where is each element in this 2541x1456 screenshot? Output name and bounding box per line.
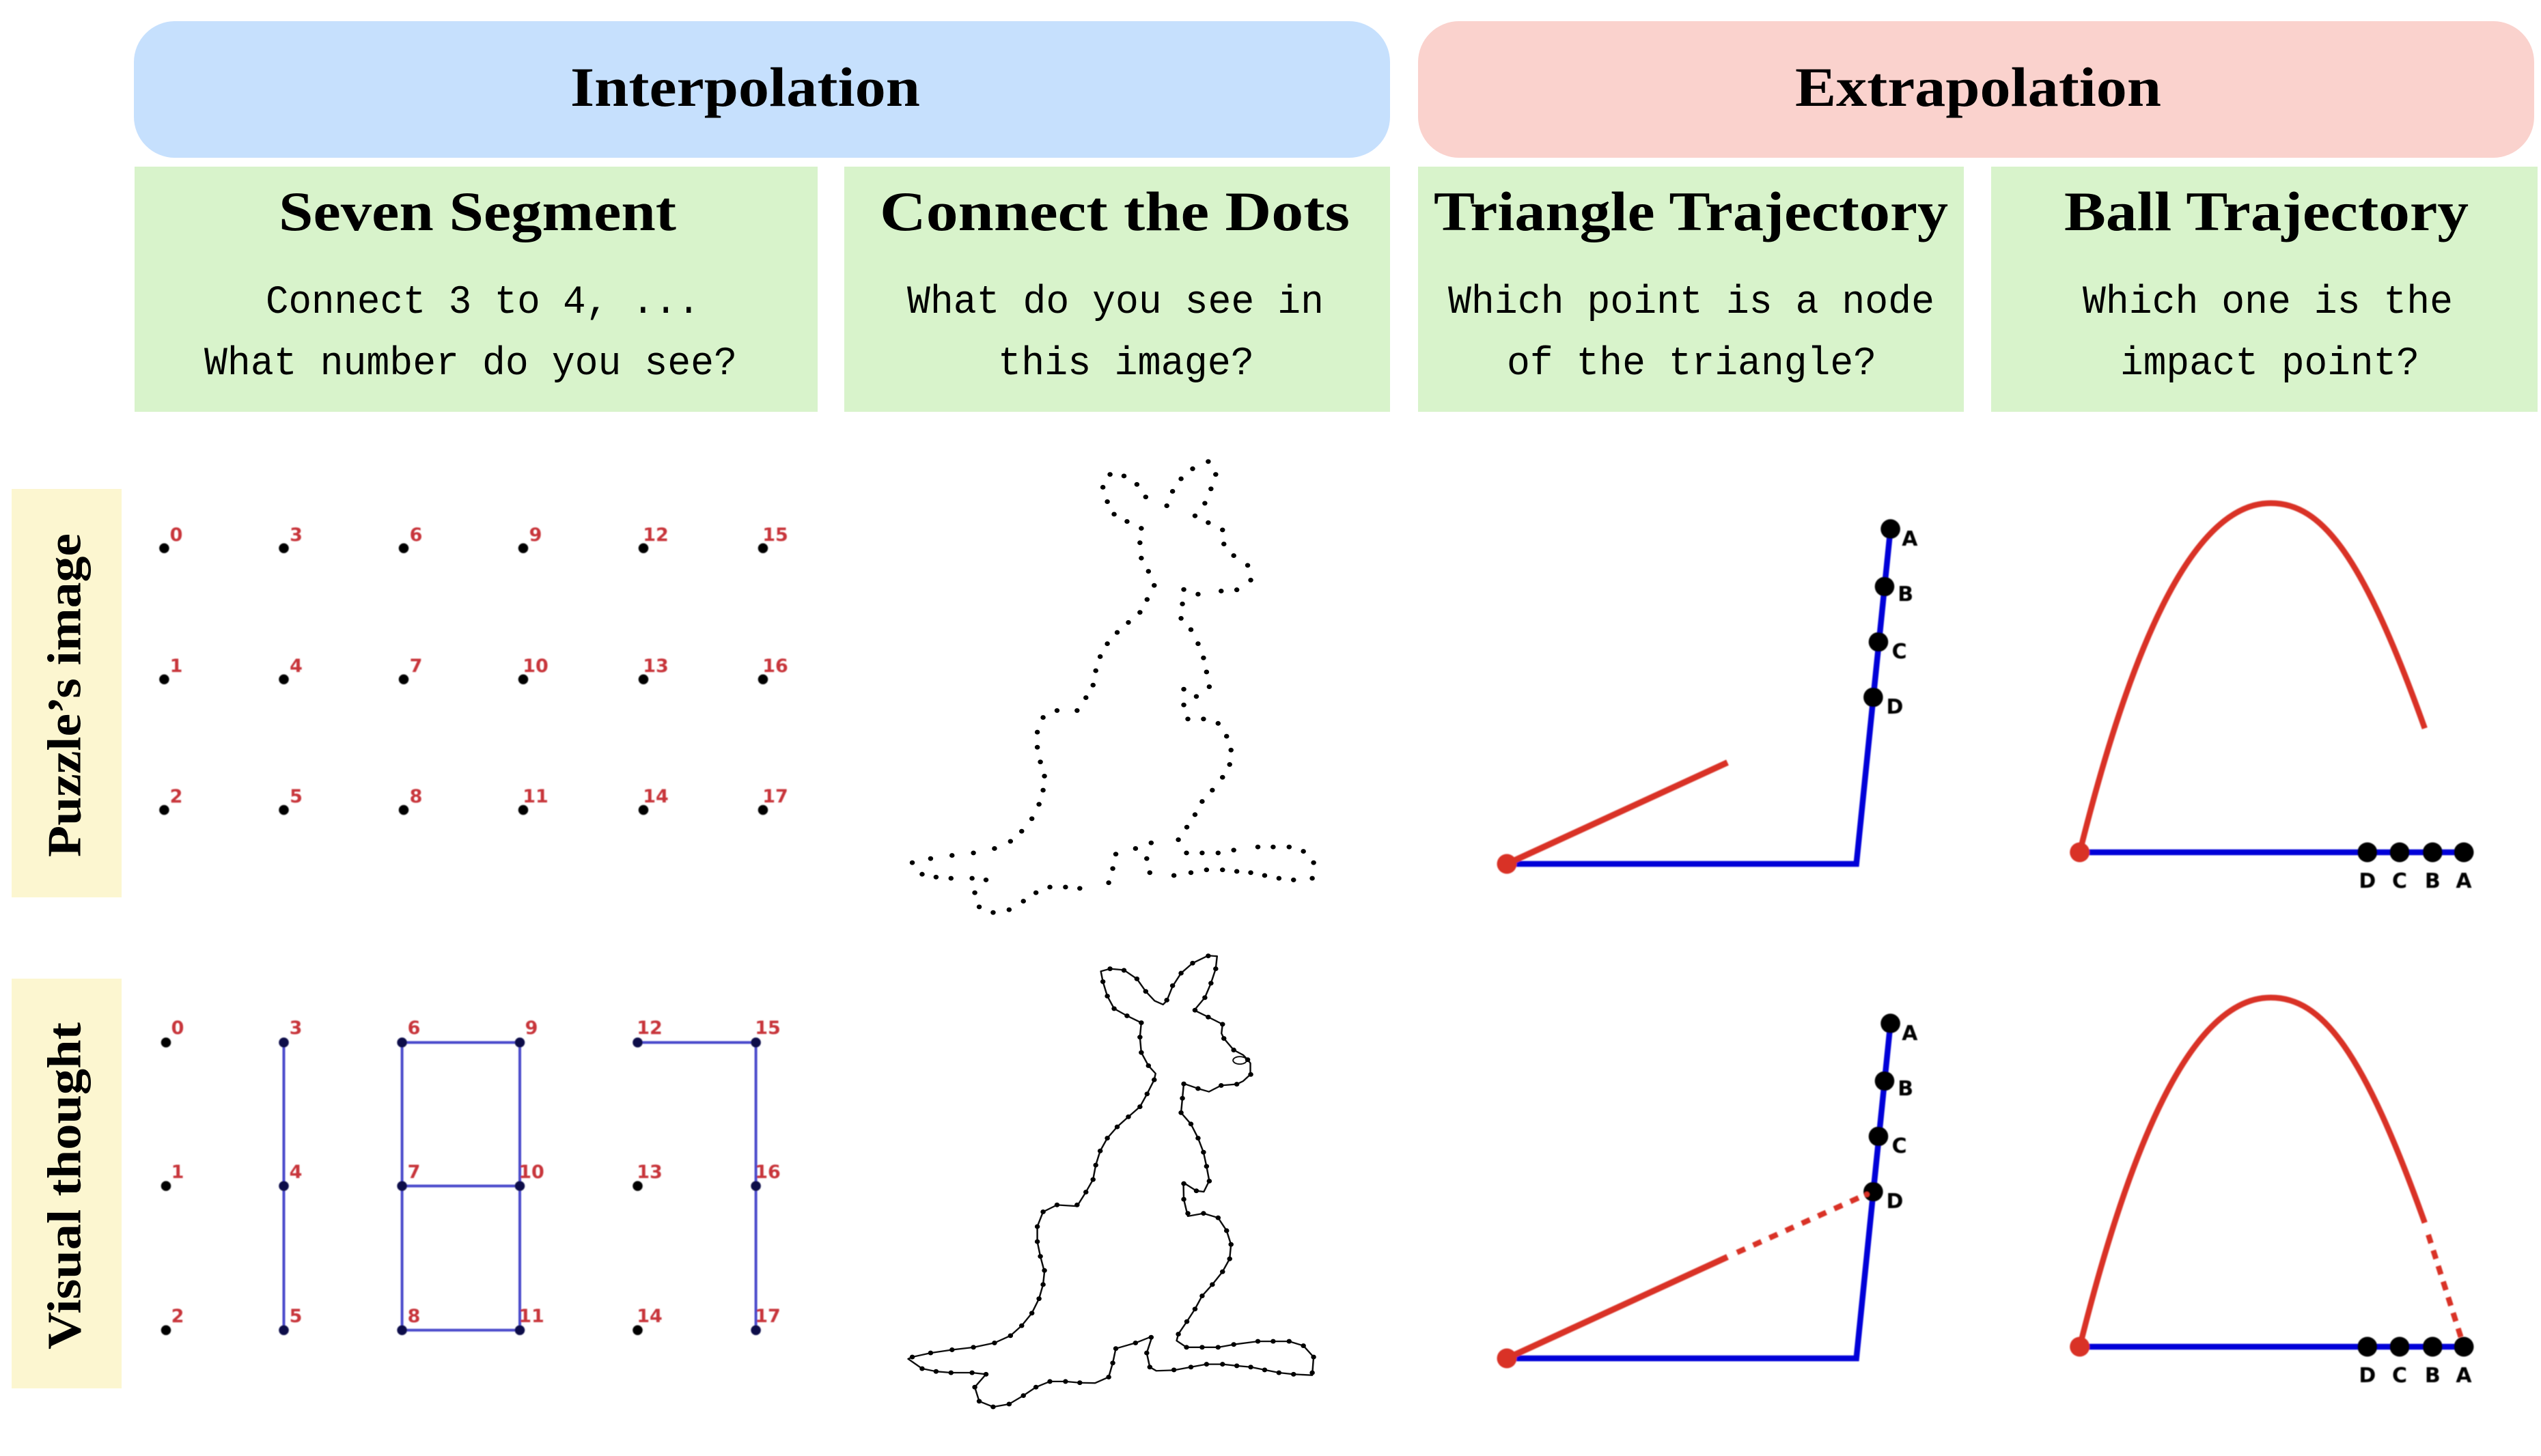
chart: Seven Segment visual thought: 1 [171,1162,184,1183]
panel: Seven Segment heading: Connect 3 to 4, ... [266,281,700,325]
chart: ball trajectory puzzle: A [2456,869,2472,893]
panel: Ball Trajectory heading [1991,167,2538,412]
row label: Visual thought: Visual thought [38,1022,92,1349]
chart: ball trajectory puzzle: D [2359,869,2376,893]
chart: Seven Segment puzzle dots: 13 [643,656,669,677]
chart: Seven Segment puzzle dots [164,524,788,810]
chart: Seven Segment visual thought: 6 [408,1018,420,1039]
panel: Connect the Dots heading: Connect the Dots [880,180,1350,242]
chart: Seven Segment visual thought: 2 [171,1306,184,1327]
chart: ball trajectory visual thought: B [2425,1364,2441,1388]
chart: ball trajectory puzzle [2070,503,2474,893]
chart: kangaroo outline visual thought [908,955,1314,1407]
chart: ball trajectory puzzle: C [2392,869,2407,893]
chart: Seven Segment visual thought: 5 [290,1306,302,1327]
panel: Connect the Dots heading: this image? [998,342,1254,387]
chart: triangle trajectory puzzle: D [1887,695,1903,719]
panel: Extrapolation header [1418,21,2534,158]
chart: Seven Segment puzzle dots: 4 [290,656,303,677]
chart: Seven Segment visual thought [166,1018,781,1330]
panel: Interpolation header: Interpolation [570,56,920,118]
panel: Triangle Trajectory heading: Triangle Trajectory [1434,180,1948,242]
chart: Seven Segment visual thought: 4 [290,1162,302,1183]
chart: Seven Segment puzzle dots: 2 [170,786,182,807]
chart: Seven Segment visual thought: 13 [637,1162,663,1183]
chart: Seven Segment puzzle dots: 5 [290,786,303,807]
chart: triangle trajectory visual thought [1497,1013,1918,1369]
chart: Seven Segment puzzle dots: 1 [170,656,182,677]
chart: Seven Segment visual thought: 17 [755,1306,781,1327]
chart: ball trajectory visual thought: D [2359,1364,2376,1388]
chart: Seven Segment puzzle dots: 3 [290,524,303,546]
panel: Triangle Trajectory heading: of the triangle? [1507,342,1876,387]
chart: triangle trajectory puzzle [1497,519,1918,874]
chart: Seven Segment puzzle dots: 8 [410,786,422,807]
chart: ball trajectory visual thought [2070,998,2474,1388]
chart: Seven Segment visual thought: 11 [518,1306,544,1327]
chart: Seven Segment visual thought: 8 [408,1306,420,1327]
chart: Seven Segment puzzle dots: 17 [762,786,788,807]
chart: Seven Segment visual thought: 3 [290,1018,302,1039]
panel: Seven Segment heading [135,167,818,412]
chart: Seven Segment puzzle dots: 12 [643,524,669,546]
chart: Seven Segment visual thought: 12 [637,1018,663,1039]
chart: Seven Segment visual thought: 16 [755,1162,781,1183]
chart: Seven Segment visual thought: 0 [171,1018,184,1039]
chart: Seven Segment visual thought: 9 [525,1018,538,1039]
row label: Puzzle's image [12,489,122,897]
panel: Connect the Dots heading: What do you see in [907,281,1324,325]
chart: ball trajectory visual thought: C [2392,1364,2407,1388]
panel: Extrapolation header: Extrapolation [1795,56,2161,118]
panel: Connect the Dots heading [844,167,1390,412]
chart: Seven Segment visual thought: 10 [518,1162,544,1183]
chart: Seven Segment visual thought: 15 [755,1018,781,1039]
chart: Seven Segment puzzle dots: 11 [523,786,549,807]
panel: Triangle Trajectory heading [1418,167,1964,412]
chart: Seven Segment puzzle dots: 0 [170,524,182,546]
chart: Seven Segment puzzle dots: 7 [410,656,422,677]
panel: Ball Trajectory heading: Ball Trajectory [2064,180,2469,242]
panel: Ball Trajectory heading: impact point? [2120,342,2419,387]
chart: triangle trajectory visual thought: D [1887,1190,1903,1214]
chart: triangle trajectory puzzle: A [1902,527,1918,551]
panel: Seven Segment heading: Seven Segment [279,180,676,242]
row label: Visual thought [12,979,122,1388]
chart: triangle trajectory visual thought: B [1898,1077,1913,1101]
chart: triangle trajectory visual thought: A [1902,1022,1918,1046]
chart: Seven Segment puzzle dots: 15 [762,524,788,546]
panel: Interpolation header [134,21,1390,158]
panel: Seven Segment heading: What number do you see? [204,342,737,387]
chart: Seven Segment visual thought: 14 [637,1306,663,1327]
chart: triangle trajectory visual thought: C [1892,1134,1907,1158]
chart: triangle trajectory puzzle: C [1892,640,1907,664]
chart: triangle trajectory puzzle: B [1898,583,1913,606]
chart: Seven Segment puzzle dots: 16 [762,656,788,677]
chart: kangaroo dots puzzle [913,462,1314,912]
chart: Seven Segment puzzle dots: 9 [529,524,542,546]
chart: Seven Segment puzzle dots: 6 [410,524,422,546]
chart: Seven Segment visual thought: 7 [408,1162,420,1183]
chart: ball trajectory visual thought: A [2456,1364,2472,1388]
row label: Puzzle's image: Puzzle’s image [38,533,92,857]
chart: Seven Segment puzzle dots: 10 [523,656,549,677]
panel: Ball Trajectory heading: Which one is the [2083,281,2453,325]
panel: Triangle Trajectory heading: Which point is a node [1448,281,1934,325]
chart: ball trajectory puzzle: B [2425,869,2441,893]
chart: Seven Segment puzzle dots: 14 [643,786,669,807]
